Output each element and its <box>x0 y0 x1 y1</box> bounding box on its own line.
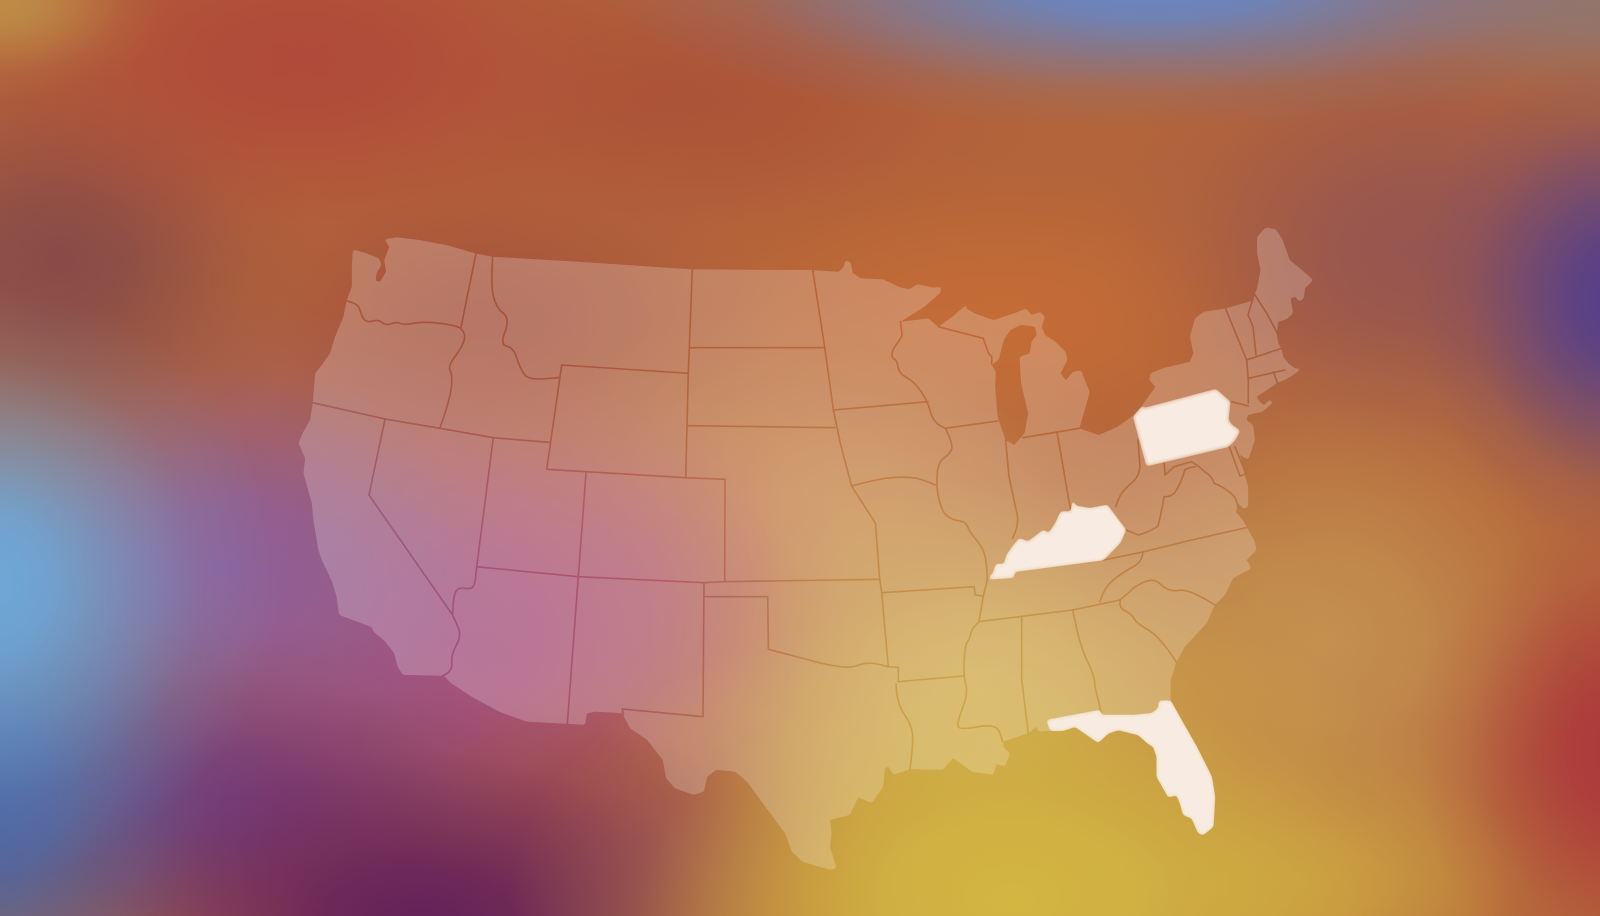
state boundaries <box>313 253 1285 769</box>
map: contiguous United States <box>298 227 1314 870</box>
highlighted state: Pennsylvania <box>1133 389 1240 466</box>
highlighted state: Kentucky <box>988 500 1126 579</box>
highlighted state: Florida <box>1047 701 1215 835</box>
land: lower 48 silhouette <box>298 227 1314 870</box>
